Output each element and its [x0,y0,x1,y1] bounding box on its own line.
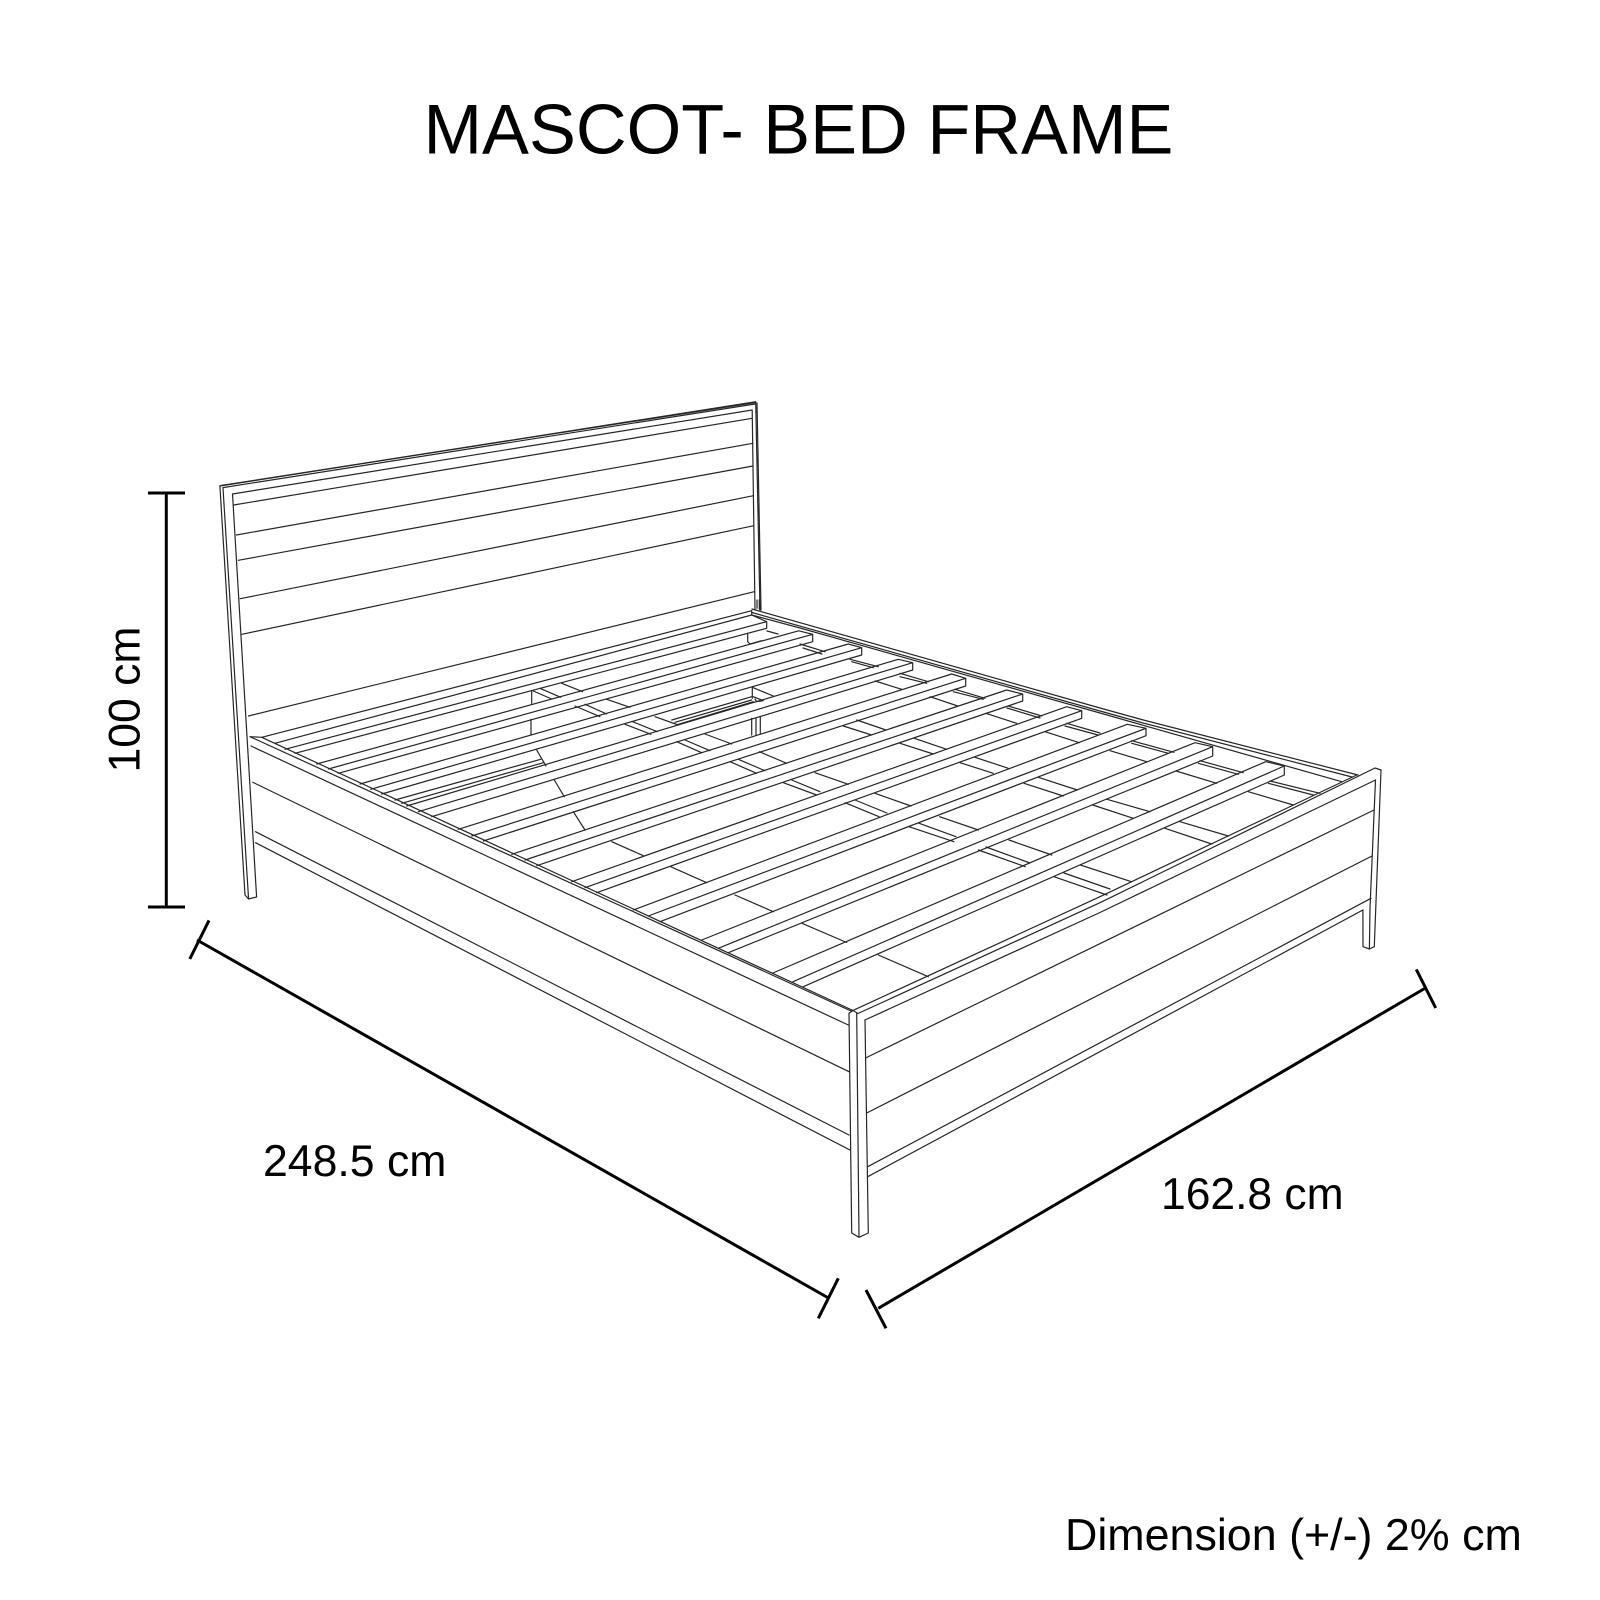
cross bars seen between slats [533,631,1320,977]
hidden centre supports [395,633,773,830]
length dimension line [190,920,838,1318]
slat 4 [407,659,913,817]
far side rail [752,600,1358,782]
height dimension line [148,493,185,907]
bed frame line drawing [220,402,1381,1237]
slat 2 [317,631,813,773]
slats [262,611,1284,987]
slat 7 [572,707,1082,893]
right foot post and leg [1363,770,1381,949]
length label: 248.5 cm [263,1137,446,1186]
width label: 162.8 cm [1161,1170,1344,1219]
height label: 100 cm [100,627,150,772]
slat 8 [633,724,1146,922]
side rail panel [250,737,853,1150]
slat 10 [773,762,1284,987]
foot rail panel [853,768,1381,1177]
slat 1 [262,611,767,753]
width dimension line [866,969,1436,1328]
slat 5 [458,674,966,841]
tolerance note: Dimension (+/-) 2% cm [1065,1510,1522,1560]
headboard [220,402,761,716]
front corner leg [849,1010,868,1237]
slat 3 [360,644,862,794]
left headboard post and leg [220,486,257,899]
title: MASCOT- BED FRAME [424,90,1173,168]
slat 9 [702,743,1213,953]
slat 6 [512,690,1023,866]
